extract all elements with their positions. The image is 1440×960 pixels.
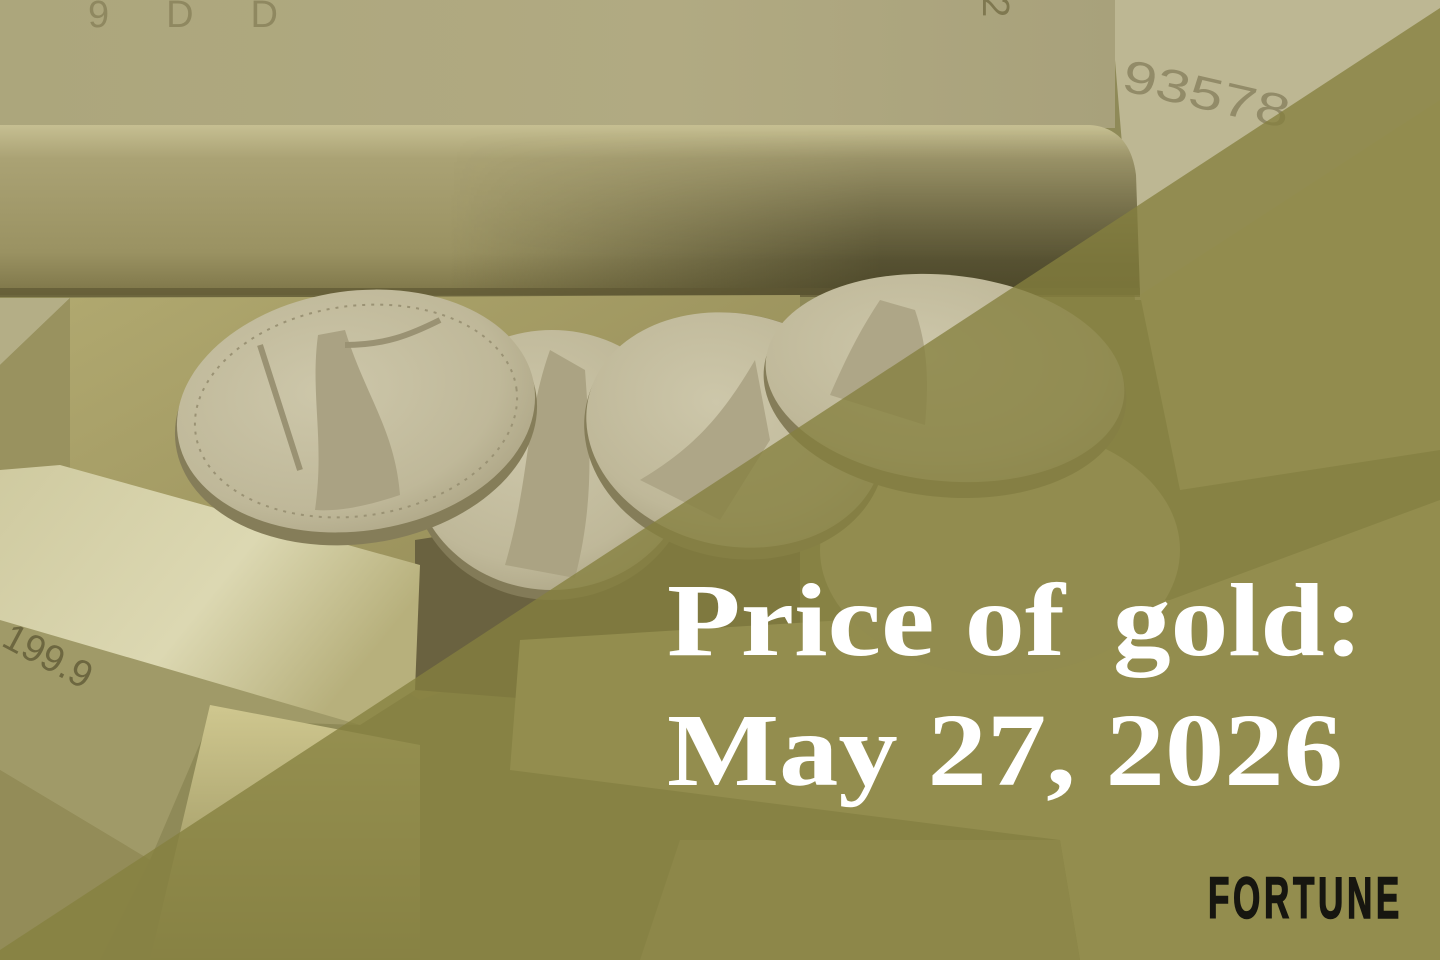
coin: liberty coin left [159, 267, 553, 568]
coin: back right coin lower [820, 425, 1180, 675]
coin: middle coin [410, 330, 694, 600]
gold bar: lower left bars [0, 616, 420, 960]
gold bar: lower right bars [510, 100, 1440, 960]
gold bar: top large bar [0, 0, 1140, 297]
gold bar: right background bar: 93578 [1118, 49, 1295, 138]
title line: Price of gold: gold: [1113, 563, 1363, 678]
coin: top right coin [752, 257, 1138, 515]
logo: Fortune: FORTUNE [1208, 867, 1403, 931]
coin: third coin [561, 285, 909, 587]
gold bar: middle bar under coins [0, 295, 800, 725]
title line: Price of gold: Price of [667, 563, 1067, 678]
title line: Price of gold [667, 563, 1363, 678]
title line: date: May 27, 2026 [667, 693, 1343, 808]
gold bar: right background bar [1110, 0, 1440, 300]
title [667, 563, 1363, 808]
